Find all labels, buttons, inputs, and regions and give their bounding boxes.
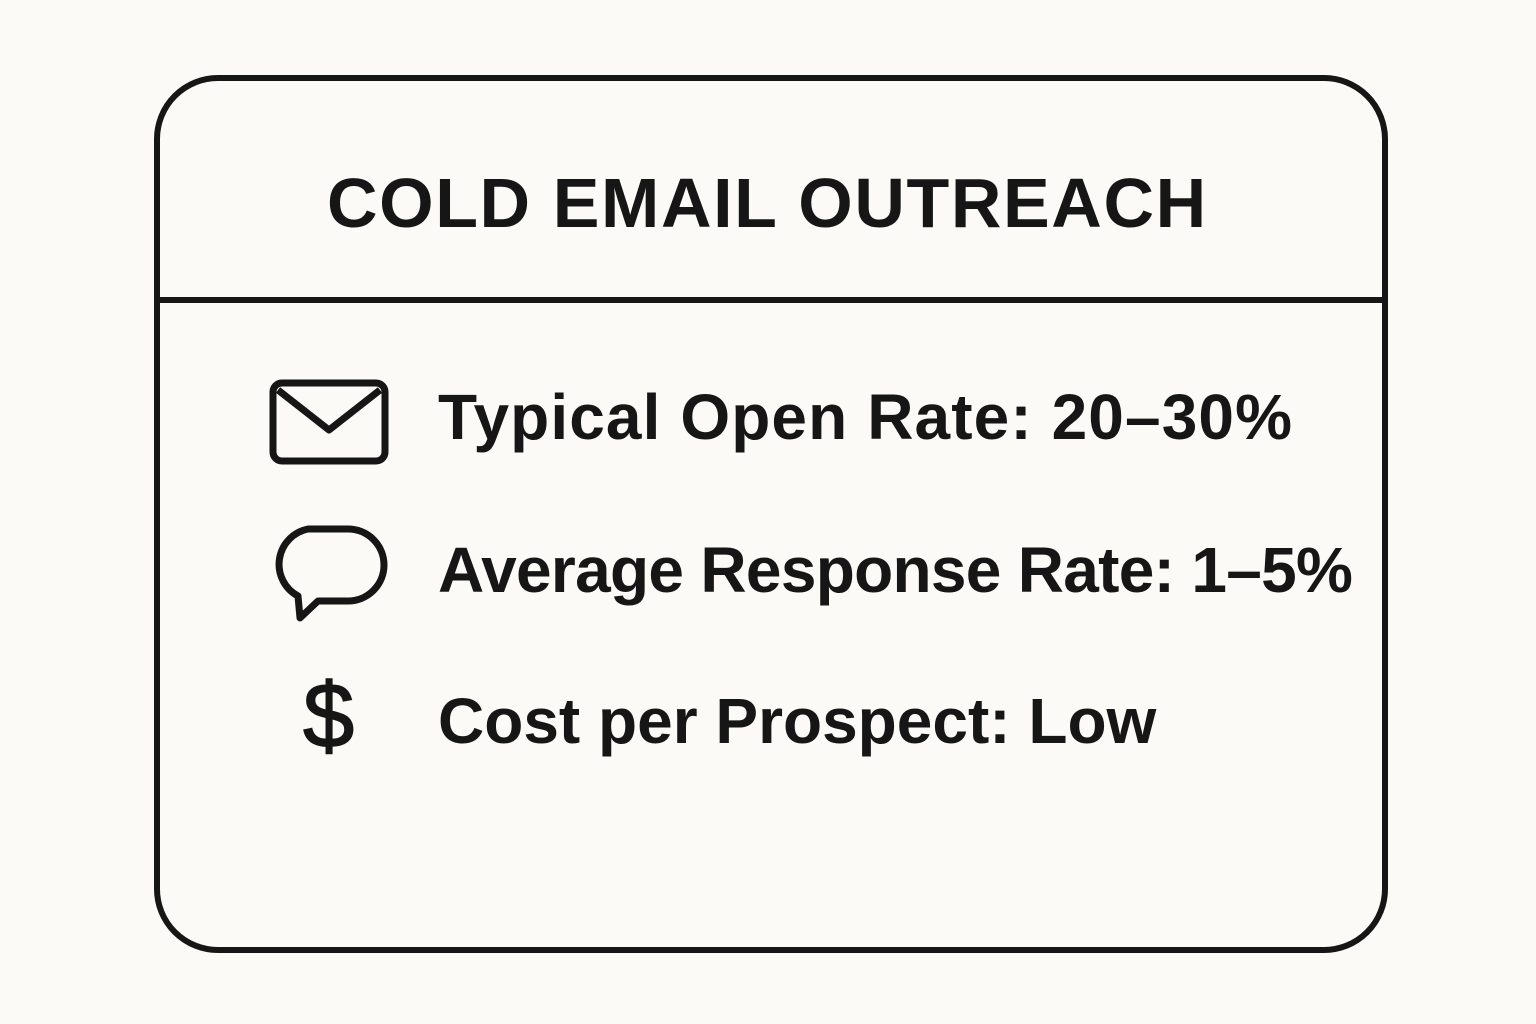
title: COLD EMAIL OUTREACH — [327, 164, 1208, 242]
icon: envelope — [270, 380, 388, 464]
text: open rate: Typical Open Rate: 20–30% — [438, 381, 1293, 453]
panel: card — [154, 75, 1388, 953]
icon: speech bubble — [276, 526, 388, 622]
icon: dollar: $ — [303, 665, 354, 767]
divider line — [160, 297, 1382, 303]
text: response rate: Average Response Rate: 1–5% — [438, 534, 1352, 606]
text: cost: Cost per Prospect: Low — [438, 685, 1156, 757]
